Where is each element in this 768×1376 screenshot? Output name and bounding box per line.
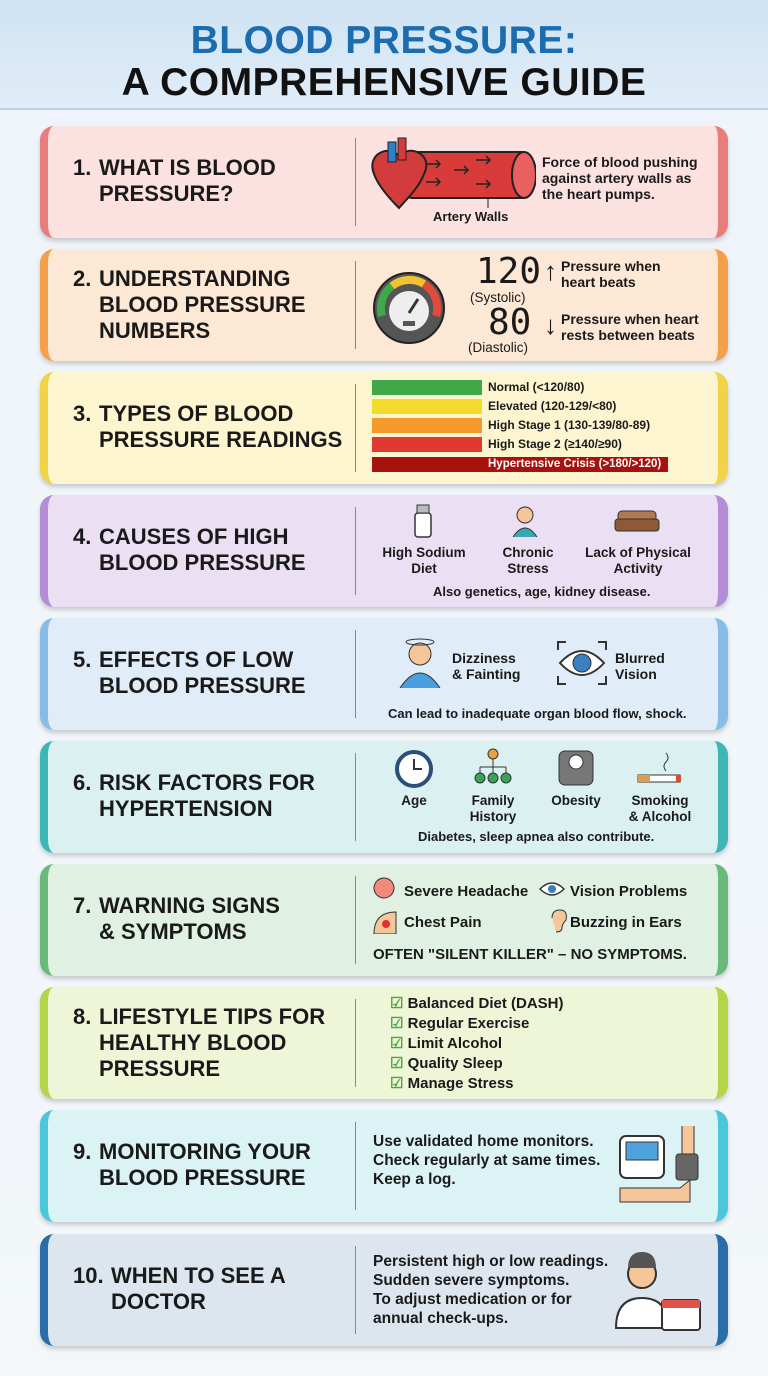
chart: reading categories: Hypertensive Crisis (>180/>120) <box>488 458 661 470</box>
label: sodium: High Sodium <box>382 545 466 560</box>
heading <box>73 647 306 698</box>
panel 5: effects of low bp <box>40 618 728 730</box>
icon: salt shaker <box>414 504 432 538</box>
arrow up: ↑ <box>544 256 557 286</box>
heading: 10. <box>73 1263 104 1288</box>
heading: PRESSURE? <box>99 181 233 206</box>
heading: BLOOD PRESSURE <box>99 550 306 575</box>
label: blurred vision: Vision <box>615 666 657 682</box>
label: sodium: Diet <box>411 561 437 576</box>
systolic text <box>561 258 661 290</box>
heading <box>73 524 306 575</box>
panel 6: risk factors: & Alcohol <box>629 809 691 824</box>
label: blurred vision: Blurred <box>615 650 665 666</box>
chart: reading categories <box>372 380 668 472</box>
label: stress <box>502 545 554 576</box>
label: sodium <box>382 545 466 576</box>
icon: bp monitor <box>619 1126 698 1202</box>
heading <box>73 1263 286 1314</box>
heading: WHEN TO SEE A <box>111 1263 286 1288</box>
arrow down: ↓ <box>544 310 557 340</box>
icon: gauge <box>373 272 445 344</box>
panel 4: causes <box>40 495 728 607</box>
checklist: ☑ Balanced Diet (DASH) <box>390 995 563 1012</box>
heading <box>73 1139 311 1190</box>
systolic text: heart beats <box>561 274 636 290</box>
heading: TYPES OF BLOOD <box>99 401 293 426</box>
icon: scale <box>558 750 594 786</box>
panel 7: warning signs: Severe Headache <box>404 883 528 900</box>
panel 2: understanding numbers: (Systolic) <box>470 290 526 305</box>
text: Keep a log. <box>373 1171 456 1188</box>
heading: RISK FACTORS FOR <box>99 770 315 795</box>
panel 9: monitoring <box>40 1110 728 1222</box>
checklist: ☑ Regular Exercise <box>390 1015 529 1032</box>
label: activity: Lack of Physical <box>585 545 691 560</box>
icon: chest pain <box>374 912 396 934</box>
heading: PRESSURE <box>99 1056 220 1081</box>
description: the heart pumps. <box>542 186 655 202</box>
description <box>542 154 698 202</box>
diastolic text <box>561 311 699 343</box>
heading: BLOOD PRESSURE <box>99 1165 306 1190</box>
header <box>0 0 768 110</box>
title line 2: A COMPREHENSIVE GUIDE <box>122 61 646 104</box>
diastolic number: 80 <box>488 302 531 343</box>
diastolic text: rests between beats <box>561 327 695 343</box>
label: dizziness <box>452 650 520 682</box>
label: dizziness: Dizziness <box>452 650 516 666</box>
icon: couch <box>614 510 660 532</box>
labels: Age <box>401 793 427 808</box>
heading <box>73 893 280 944</box>
panel 6: risk factors: Smoking <box>631 793 688 808</box>
icon: headache <box>374 878 394 898</box>
icon: dizzy person <box>400 638 440 688</box>
text: To adjust medication or for <box>373 1291 572 1308</box>
panel 7: warning signs: Vision Problems <box>570 883 687 900</box>
heading: & SYMPTOMS <box>99 919 247 944</box>
heading: 8. <box>73 1004 91 1029</box>
panel 6: risk factors: Obesity <box>551 793 601 808</box>
icon: heart and artery <box>371 138 536 210</box>
text <box>373 1133 600 1188</box>
callout: silent killer: OFTEN "SILENT KILLER" – NO SYMPTOMS. <box>373 946 687 963</box>
note: Can lead to inadequate organ blood flow, shock. <box>388 706 687 721</box>
label: dizziness: & Fainting <box>452 666 520 682</box>
heading: 6. <box>73 770 91 795</box>
heading: LIFESTYLE TIPS FOR <box>99 1004 325 1029</box>
icon: stress <box>512 506 538 538</box>
label: stress: Chronic <box>502 545 554 560</box>
panel 3: types of readings <box>40 372 728 484</box>
heading: PRESSURE READINGS <box>99 427 342 452</box>
text: annual check-ups. <box>373 1310 508 1327</box>
checklist: ☑ Limit Alcohol <box>390 1035 502 1052</box>
panel 6: risk factors: History <box>470 809 516 824</box>
systolic text: Pressure when <box>561 258 661 274</box>
heading: 2. <box>73 266 91 291</box>
chart: reading categories: Elevated (120-129/<80) <box>488 399 616 413</box>
icon: ear <box>552 910 567 932</box>
heading: 5. <box>73 647 91 672</box>
chart: reading categories: High Stage 1 (130-139/80-89) <box>488 418 650 432</box>
systolic number: 120 <box>476 251 541 292</box>
heading: 3. <box>73 401 91 426</box>
panel 6: risk factors: Family <box>472 793 514 808</box>
icon: cigarette <box>638 752 681 782</box>
text: Sudden severe symptoms. <box>373 1272 569 1289</box>
heading <box>73 266 306 343</box>
panel 7: warning signs: Chest Pain <box>404 914 482 931</box>
heading: CAUSES OF HIGH <box>99 524 288 549</box>
heading <box>73 401 342 452</box>
label: stress: Stress <box>507 561 549 576</box>
checklist: ☑ Manage Stress <box>390 1075 514 1092</box>
panel 2: understanding numbers: (Diastolic) <box>468 340 528 355</box>
icon: clock <box>395 750 433 788</box>
text: Persistent high or low readings. <box>373 1253 608 1270</box>
description: against artery walls as <box>542 170 691 186</box>
note: Diabetes, sleep apnea also contribute. <box>418 829 654 844</box>
checklist <box>390 995 563 1092</box>
label: artery walls: Artery Walls <box>433 209 508 224</box>
panel 1: what is blood pressure <box>40 126 728 238</box>
icon: family tree <box>474 748 512 784</box>
heading <box>73 155 276 206</box>
heading <box>73 770 315 821</box>
heading: 7. <box>73 893 91 918</box>
icon: eye <box>557 641 607 685</box>
panel 10: when to see a doctor <box>40 1234 728 1346</box>
heading: BLOOD PRESSURE <box>99 292 306 317</box>
note: Also genetics, age, kidney disease. <box>433 584 650 599</box>
heading: MONITORING YOUR <box>99 1139 311 1164</box>
heading: WARNING SIGNS <box>99 893 280 918</box>
panel 6: risk factors <box>40 741 728 853</box>
heading: UNDERSTANDING <box>99 266 290 291</box>
heading: WHAT IS BLOOD <box>99 155 276 180</box>
icon: doctor with calendar <box>615 1252 701 1331</box>
heading: 9. <box>73 1139 91 1164</box>
chart: reading categories: High Stage 2 (≥140/≥90) <box>488 437 622 451</box>
title line 1: BLOOD PRESSURE: <box>191 19 577 62</box>
heading: EFFECTS OF LOW <box>99 647 293 672</box>
heading: HEALTHY BLOOD <box>99 1030 286 1055</box>
heading: BLOOD PRESSURE <box>99 673 306 698</box>
heading: DOCTOR <box>111 1289 206 1314</box>
heading: NUMBERS <box>99 318 210 343</box>
label: activity <box>585 545 691 576</box>
checklist: ☑ Quality Sleep <box>390 1055 503 1072</box>
panel 2: understanding numbers <box>40 249 728 361</box>
diastolic text: Pressure when heart <box>561 311 699 327</box>
label: blurred vision <box>615 650 665 682</box>
text: Use validated home monitors. <box>373 1133 594 1150</box>
heading: 4. <box>73 524 91 549</box>
heading <box>73 1004 325 1081</box>
text: Check regularly at same times. <box>373 1152 600 1169</box>
panel 7: warning signs <box>40 864 728 976</box>
panel 8: lifestyle tips <box>40 987 728 1099</box>
chart: reading categories: Normal (<120/80) <box>488 380 584 394</box>
heading: HYPERTENSION <box>99 796 273 821</box>
label: activity: Activity <box>614 561 662 576</box>
heading: 1. <box>73 155 91 180</box>
panel 7: warning signs: Buzzing in Ears <box>570 914 682 931</box>
text <box>373 1253 608 1327</box>
icon: eye <box>539 882 565 896</box>
description: Force of blood pushing <box>542 154 698 170</box>
